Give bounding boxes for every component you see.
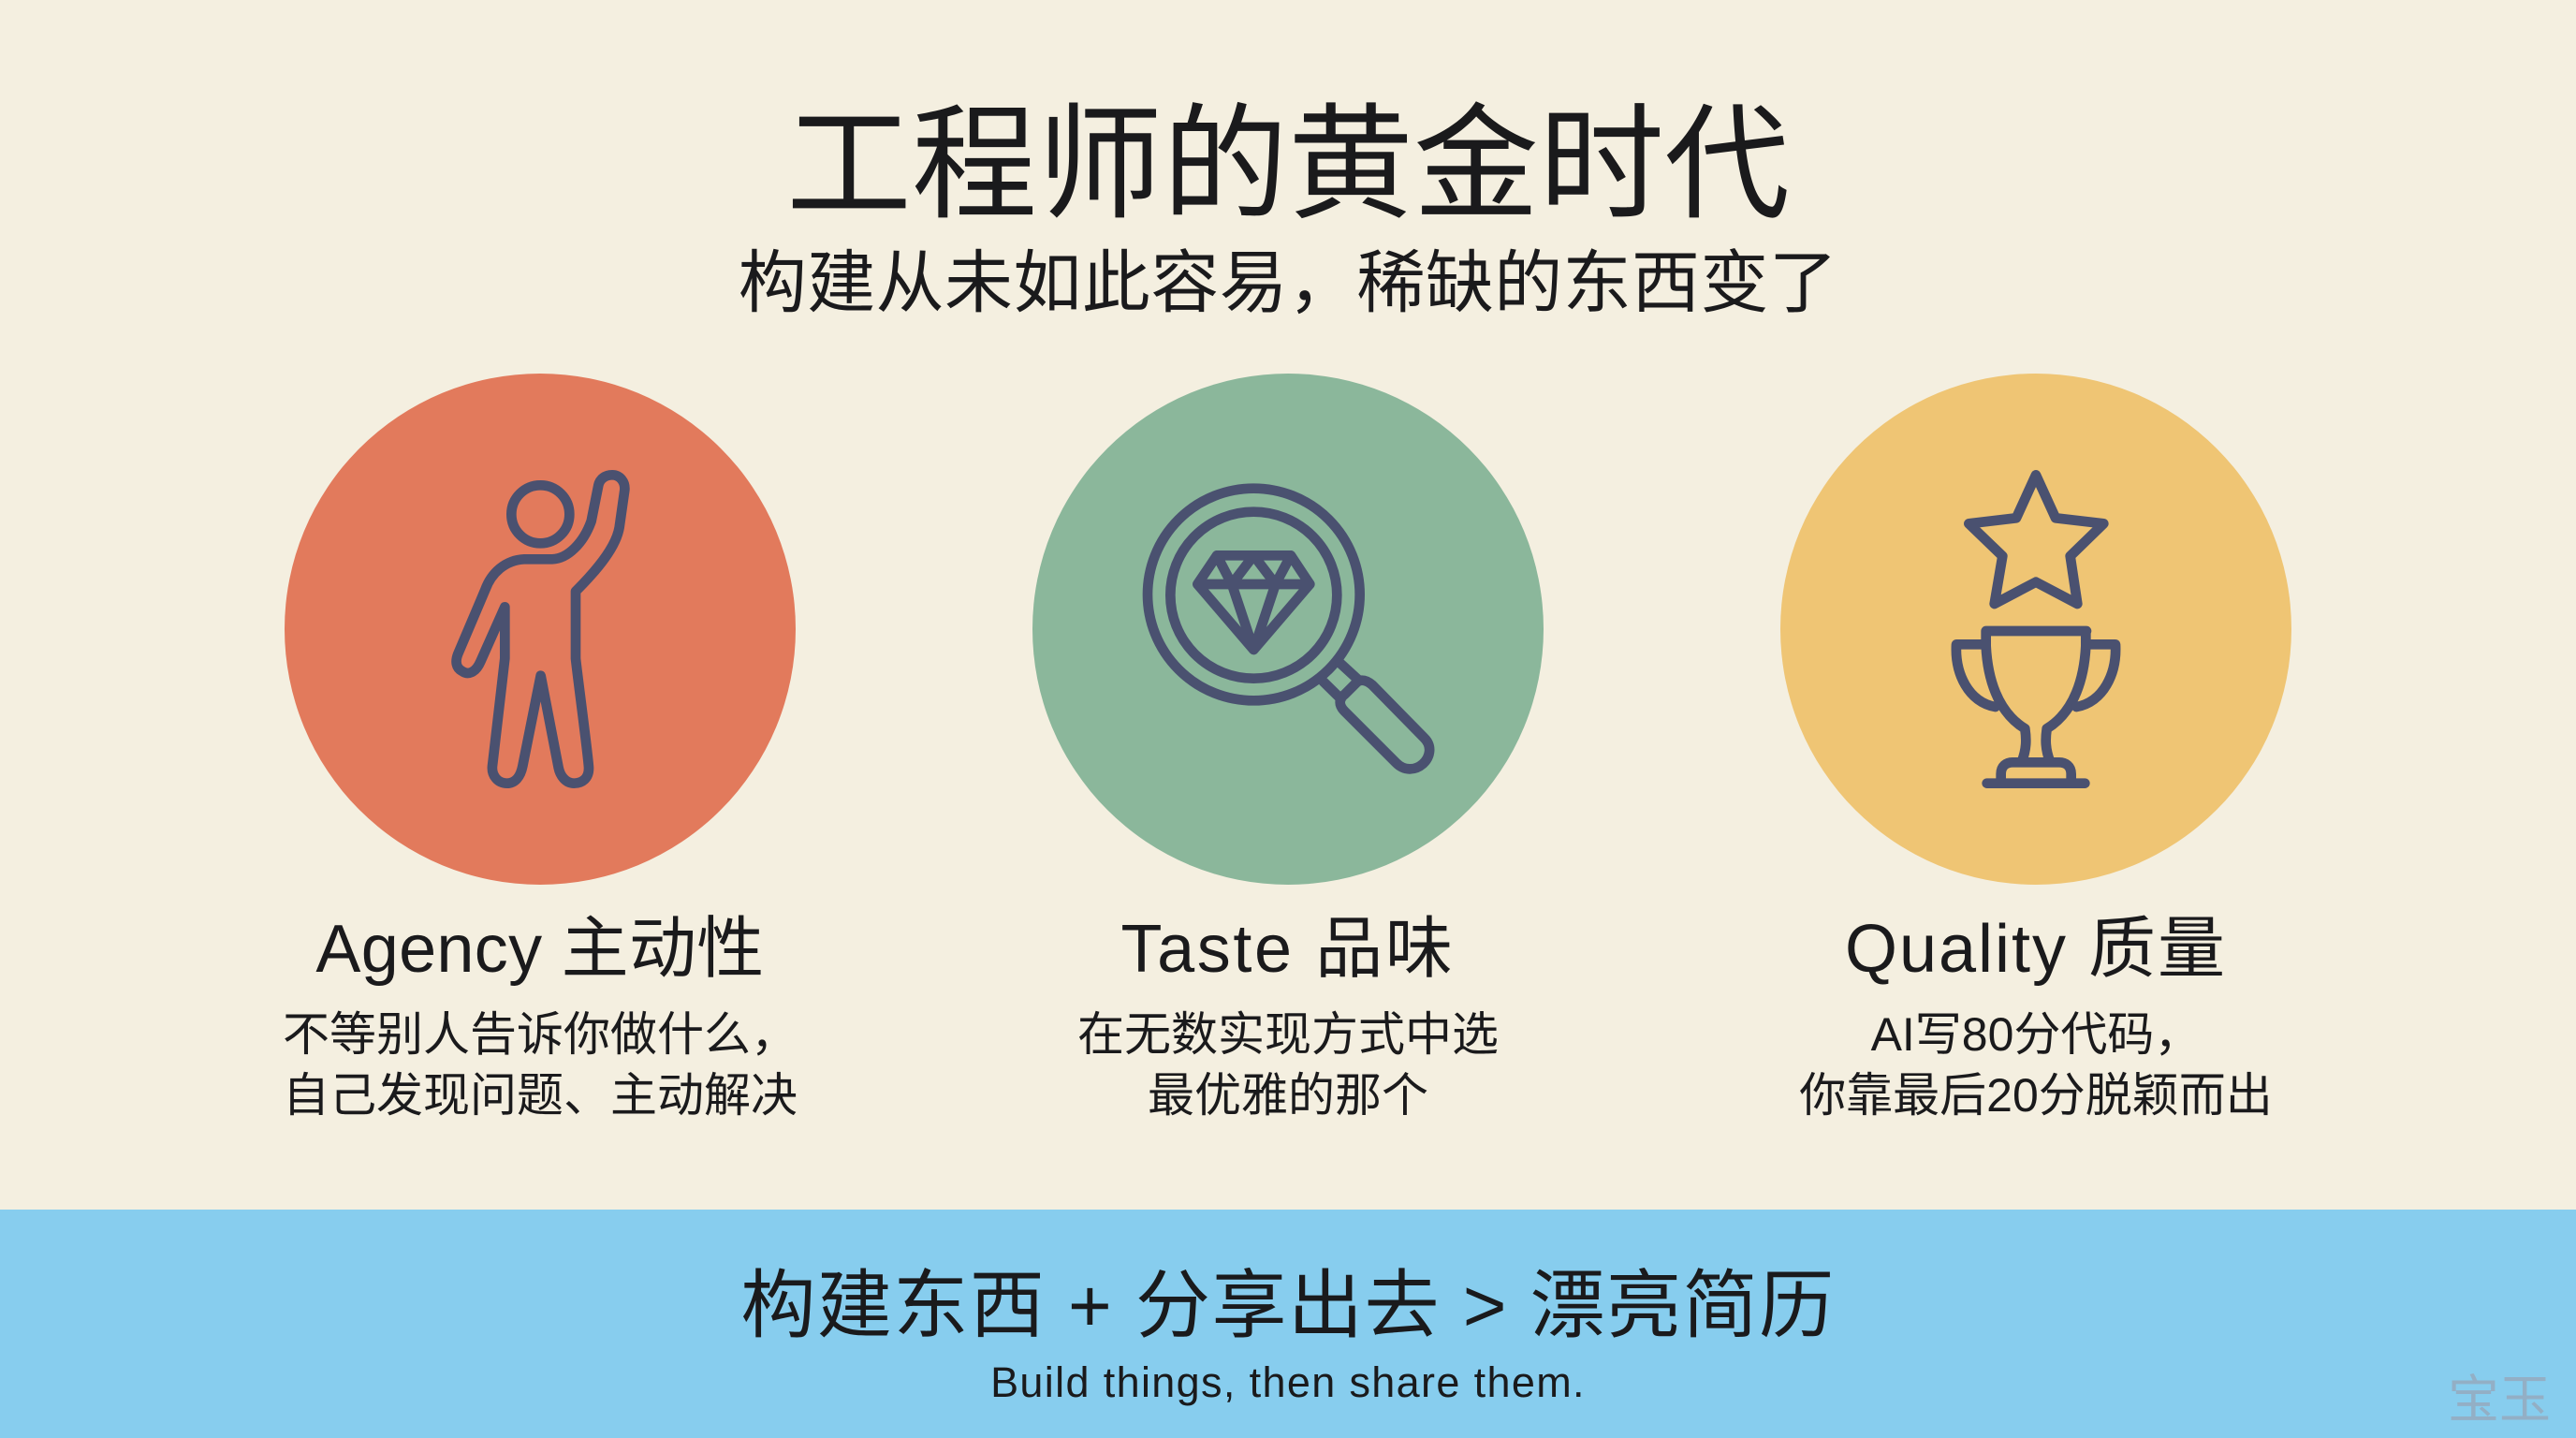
heading: agency: Agency 主动性 <box>315 912 765 987</box>
panel: agency <box>283 374 798 1122</box>
text: quality description: AI写80分代码， <box>1871 1008 2201 1061</box>
text: taste description <box>1077 1008 1499 1122</box>
heading: taste: Taste 品味 <box>1121 912 1455 987</box>
icon: person raising hand <box>457 475 624 784</box>
text: agency description: 不等别人告诉你做什么， <box>283 1008 798 1061</box>
yellow circle <box>1780 374 2291 885</box>
red circle <box>285 374 796 885</box>
icon: magnifier over diamond <box>1148 489 1429 769</box>
text: agency description: 自己发现问题、主动解决 <box>283 1069 798 1122</box>
panel: taste <box>1032 374 1544 1122</box>
panel: quality <box>1780 374 2291 1122</box>
icon: star over trophy <box>1956 475 2115 784</box>
text: quality description <box>1799 1008 2273 1122</box>
heading: quality: Quality 质量 <box>1845 912 2227 987</box>
subtitle: 构建从未如此容易，稀缺的东西变了 <box>739 245 1837 321</box>
green circle <box>1032 374 1544 885</box>
text: taste description: 最优雅的那个 <box>1148 1069 1428 1122</box>
banner subline: Build things, then share them. <box>990 1358 1586 1406</box>
text: taste description: 在无数实现方式中选 <box>1077 1008 1499 1061</box>
text: agency description <box>283 1008 798 1122</box>
watermark: 宝玉 <box>2448 1371 2551 1429</box>
banner headline: 构建东西 + 分享出去 > 漂亮简历 <box>740 1264 1836 1347</box>
text: quality description: 你靠最后20分脱颖而出 <box>1799 1069 2273 1122</box>
title: 工程师的黄金时代 <box>786 95 1790 235</box>
bottom banner background <box>0 1210 2576 1438</box>
